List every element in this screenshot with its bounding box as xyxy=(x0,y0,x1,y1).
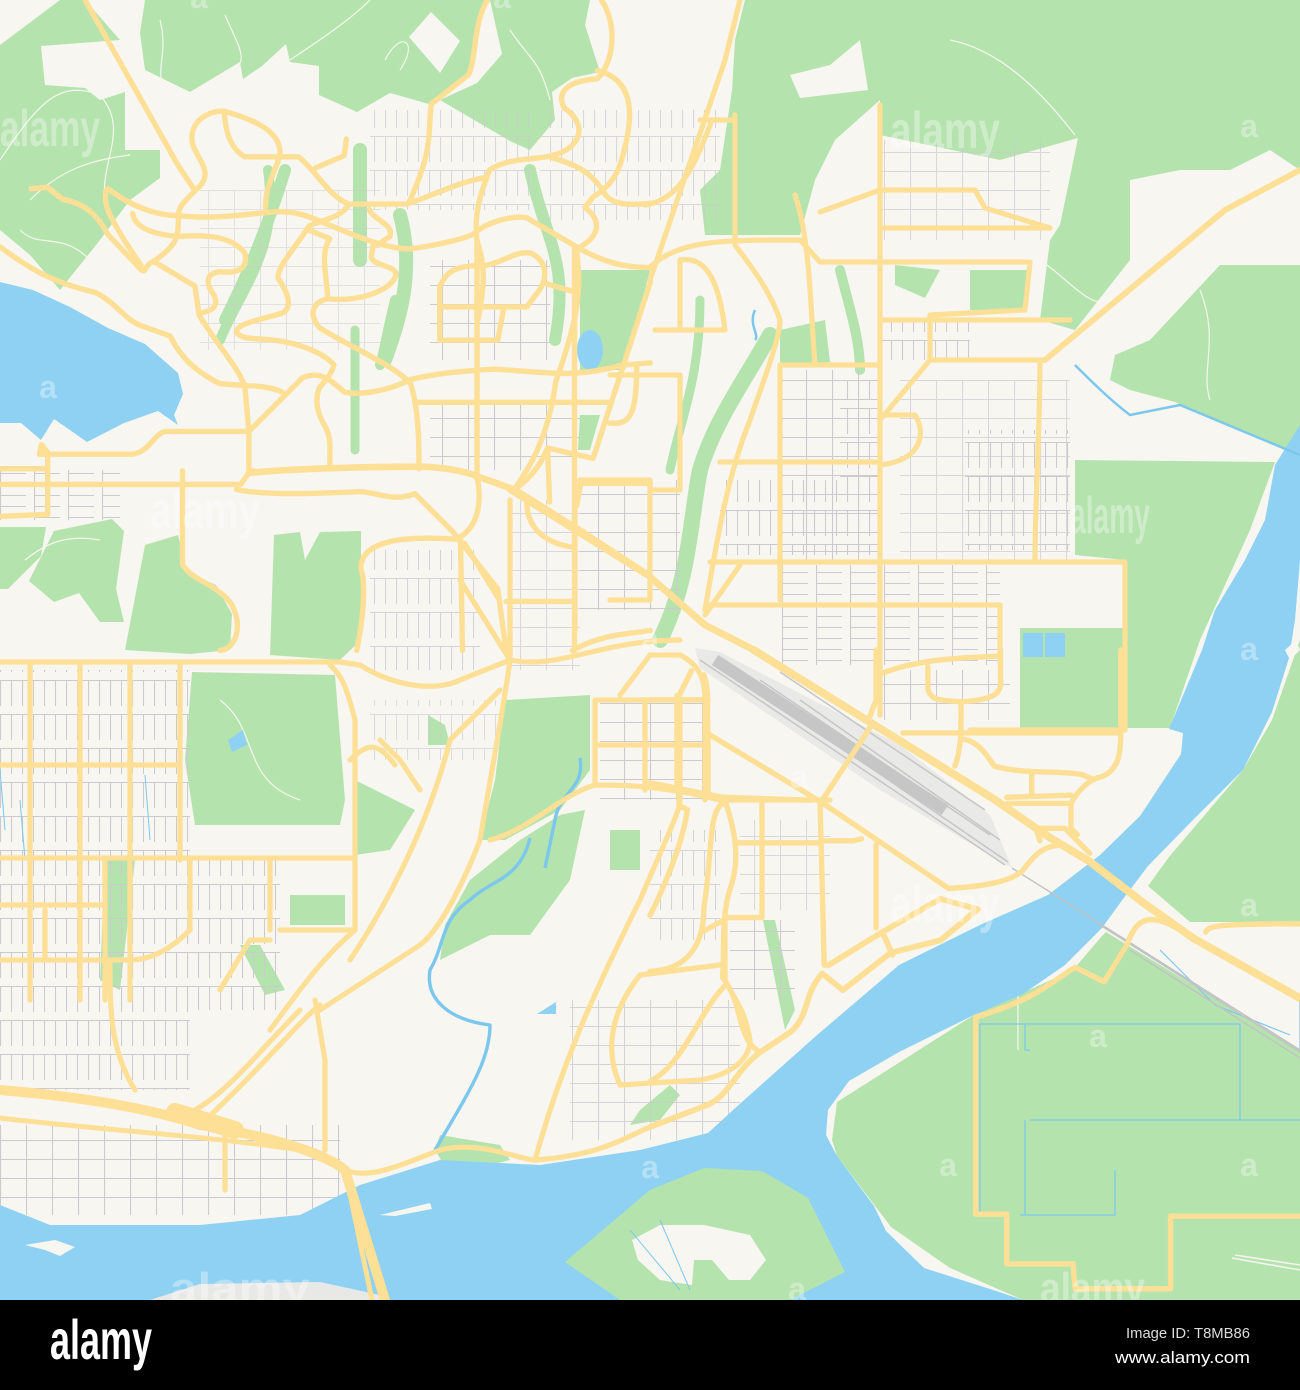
rail yard xyxy=(695,648,1300,1270)
watermarks: a xyxy=(1240,108,1258,144)
watermarks: alamy xyxy=(170,1264,311,1313)
residential street grids xyxy=(0,110,1070,1215)
watermarks: a xyxy=(1240,887,1258,923)
creeks xyxy=(0,310,1300,1290)
website url: www.alamy.com xyxy=(1114,1348,1250,1367)
cleared blocks inside forest xyxy=(409,12,868,98)
lake, river and ponds xyxy=(0,282,1300,1300)
watermarks: a xyxy=(1240,1147,1258,1183)
watermarks: a xyxy=(790,759,808,795)
image id: Image ID: T8MB86 xyxy=(1126,1325,1250,1342)
arterial roads north-west quadrant xyxy=(0,0,650,650)
watermarks: a xyxy=(39,369,57,405)
watermarks: alamy xyxy=(890,876,1000,934)
alamy logo: alamy xyxy=(50,1308,152,1371)
watermarks: alamy xyxy=(0,100,100,158)
watermarks: a xyxy=(641,621,659,657)
river islands and island interior xyxy=(25,640,1300,1300)
white trails through forest xyxy=(0,0,1210,1050)
watermarks: a xyxy=(788,1271,806,1307)
arterial roads south-east quadrant xyxy=(650,650,1300,1289)
watermarks: alamy xyxy=(150,482,260,540)
watermarks: a xyxy=(641,1149,659,1185)
watermarks: alamy xyxy=(1040,1264,1145,1313)
watermarks: a xyxy=(1240,631,1258,667)
footer bar xyxy=(0,1300,1300,1390)
watermarks: alamy xyxy=(1070,487,1150,545)
watermarks: a xyxy=(939,1147,957,1183)
river island xyxy=(565,1168,845,1300)
watermarks: alamy xyxy=(890,102,1000,160)
watermarks: a xyxy=(1089,1018,1107,1054)
